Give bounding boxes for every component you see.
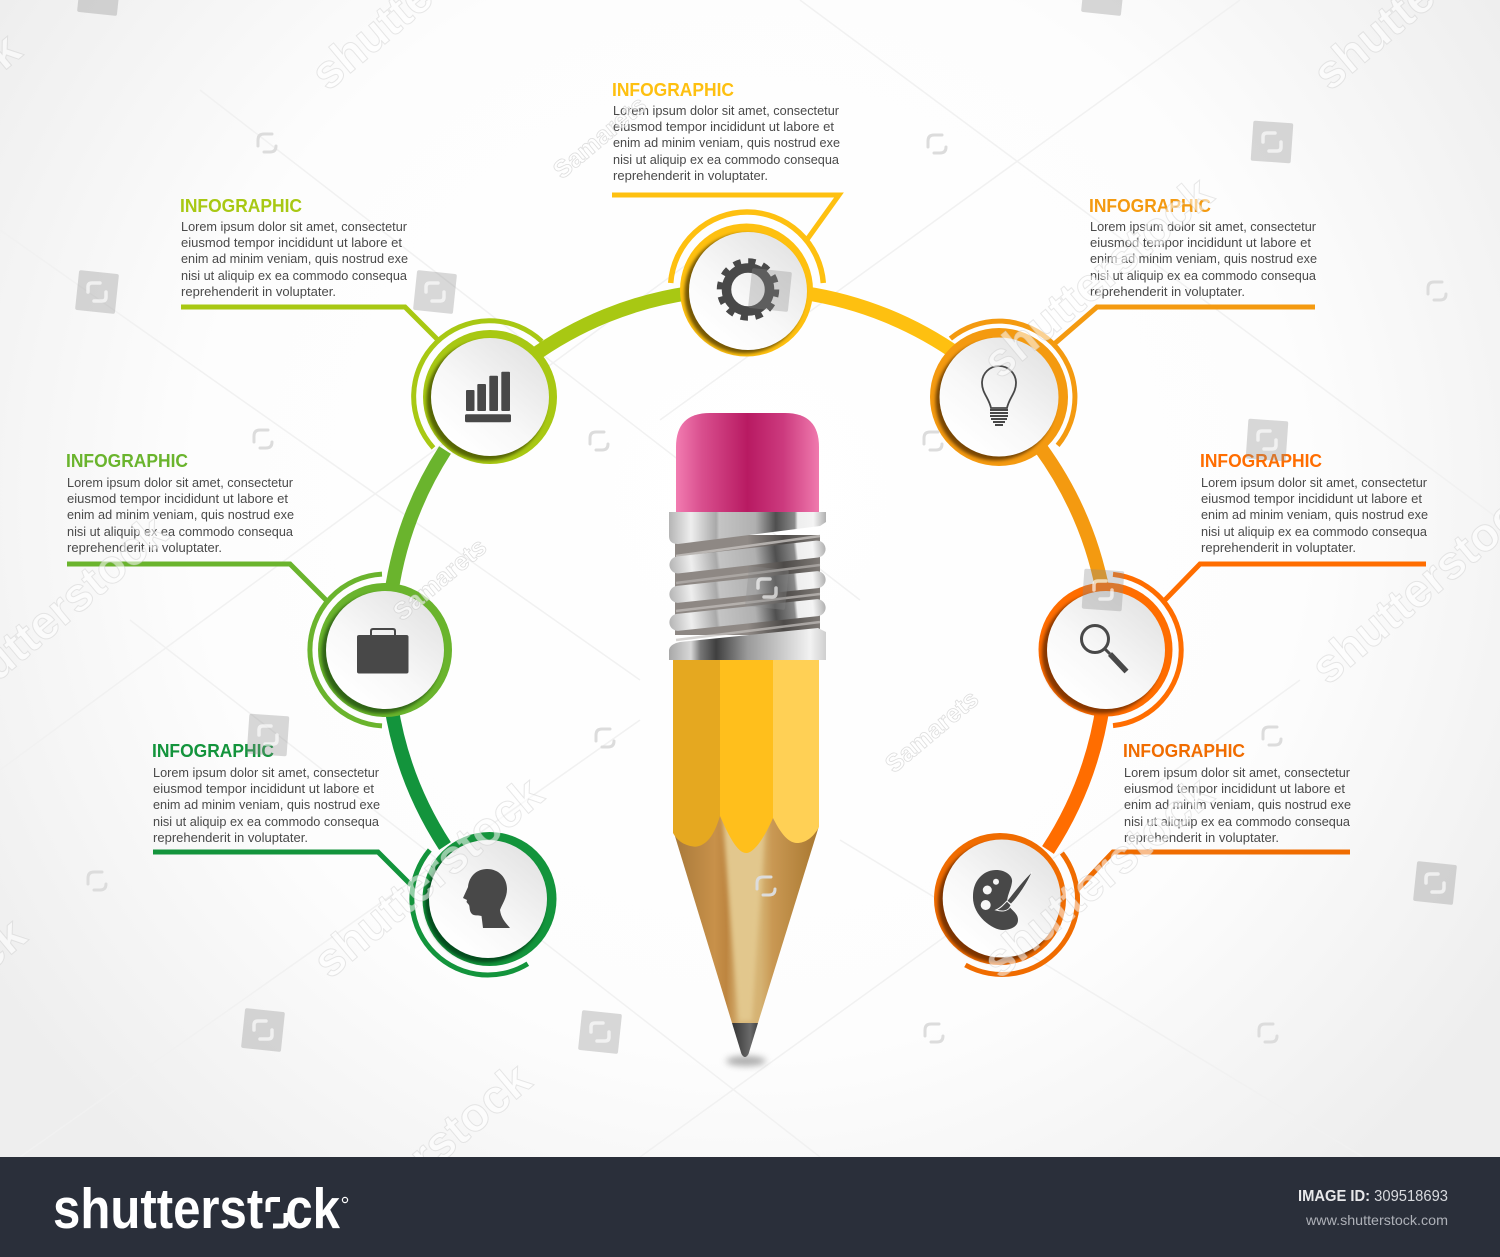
connector: head to briefcase	[391, 705, 445, 846]
website url: www.shutterstock.com	[1305, 1212, 1448, 1228]
icon: light bulb	[982, 366, 1016, 425]
body text	[613, 104, 840, 183]
body text	[181, 220, 408, 299]
node: head	[412, 832, 556, 975]
watermark overlay: shutterstock	[302, 765, 553, 988]
leader: bulb	[1053, 307, 1315, 345]
leader: gear	[612, 195, 839, 241]
pencil ferrule	[669, 512, 826, 660]
body text: nisi ut aliquip ex ea commodo consequa	[1090, 269, 1316, 283]
body text: reprehenderit in voluptater.	[67, 541, 222, 555]
body text: enim ad minim veniam, quis nostrud exe	[1201, 508, 1428, 522]
heading: INFOGRAPHIC	[180, 196, 302, 216]
body text: Lorem ipsum dolor sit amet, consectetur	[1090, 220, 1316, 234]
connector: chart to gear	[530, 293, 690, 358]
footer bar	[0, 1157, 1500, 1257]
watermark overlay: shutterstock	[972, 165, 1223, 388]
watermark overlay: Samarets	[548, 91, 652, 185]
body text: Lorem ipsum dolor sit amet, consectetur	[1201, 476, 1427, 490]
body text: nisi ut aliquip ex ea commodo consequa	[67, 525, 293, 539]
body text: enim ad minim veniam, quis nostrud exe	[67, 508, 294, 522]
body text: reprehenderit in voluptater.	[1201, 541, 1356, 555]
body text	[1201, 476, 1428, 555]
heading: INFOGRAPHIC	[66, 451, 188, 471]
text block: chart	[180, 196, 408, 299]
pencil body	[673, 655, 819, 853]
icon: head silhouette	[463, 869, 510, 928]
node: chart	[414, 321, 557, 464]
text block: gear	[612, 80, 840, 183]
text block: bulb	[1089, 196, 1317, 299]
pencil eraser	[676, 413, 819, 515]
body text: eiusmod tempor incididunt ut labore et	[1090, 236, 1312, 250]
connector: gear to bulb	[804, 293, 960, 356]
connector: bulb to magnifier	[1040, 447, 1103, 592]
connector: magnifier to palette	[1048, 705, 1103, 850]
icon: briefcase	[357, 629, 408, 674]
leader: chart	[181, 307, 438, 340]
node: gear	[671, 212, 823, 356]
heading: INFOGRAPHIC	[1200, 451, 1322, 471]
body text: eiusmod tempor incididunt ut labore et	[1124, 782, 1346, 796]
body text: eiusmod tempor incididunt ut labore et	[613, 120, 835, 134]
body text: reprehenderit in voluptater.	[1090, 285, 1245, 299]
main arc connectors	[391, 293, 1103, 850]
body text: reprehenderit in voluptater.	[613, 169, 768, 183]
heading: INFOGRAPHIC	[1123, 741, 1245, 761]
icon: bar chart	[465, 372, 511, 422]
text block: magnifier	[1200, 451, 1428, 555]
text block: palette	[1123, 741, 1351, 845]
leader lines	[67, 195, 1426, 890]
watermark overlay: shutterstock	[972, 765, 1223, 988]
connector: briefcase to chart	[391, 450, 445, 595]
body text: enim ad minim veniam, quis nostrud exe	[1124, 798, 1351, 812]
text block: head	[152, 741, 380, 845]
icon: magnifier	[1082, 626, 1126, 672]
body text: enim ad minim veniam, quis nostrud exe	[1090, 252, 1317, 266]
body text: Lorem ipsum dolor sit amet, consectetur	[153, 766, 379, 780]
body text: eiusmod tempor incididunt ut labore et	[1201, 492, 1423, 506]
body text: eiusmod tempor incididunt ut labore et	[153, 782, 375, 796]
footer logo: shutterstock	[53, 1177, 340, 1241]
heading: INFOGRAPHIC	[1089, 196, 1211, 216]
body text: eiusmod tempor incididunt ut labore et	[67, 492, 289, 506]
heading: INFOGRAPHIC	[152, 741, 274, 761]
heading: INFOGRAPHIC	[612, 80, 734, 100]
watermark overlay: Samarets	[388, 533, 492, 627]
leader: magnifier	[1165, 564, 1426, 600]
body text: nisi ut aliquip ex ea commodo consequa	[181, 269, 407, 283]
body text: enim ad minim veniam, quis nostrud exe	[153, 798, 380, 812]
pencil	[669, 413, 826, 1066]
body text: Lorem ipsum dolor sit amet, consectetur	[67, 476, 293, 490]
node: palette	[934, 833, 1078, 974]
node: briefcase	[310, 574, 452, 726]
body text	[1090, 220, 1317, 299]
body text: nisi ut aliquip ex ea commodo consequa	[1201, 525, 1427, 539]
body text: reprehenderit in voluptater.	[153, 831, 308, 845]
body text	[1124, 766, 1351, 845]
body text	[67, 476, 294, 555]
node: bulb	[930, 321, 1075, 466]
pencil lead shadow	[726, 1056, 766, 1066]
body text: Lorem ipsum dolor sit amet, consectetur	[1124, 766, 1350, 780]
body text: nisi ut aliquip ex ea commodo consequa	[153, 815, 379, 829]
leader: briefcase	[67, 564, 326, 600]
leader: head	[153, 852, 411, 885]
image id: IMAGE ID: 309518693	[1298, 1188, 1448, 1205]
body text: nisi ut aliquip ex ea commodo consequa	[1124, 815, 1350, 829]
node: magnifier	[1038, 574, 1181, 726]
body text: Lorem ipsum dolor sit amet, consectetur	[181, 220, 407, 234]
body text: nisi ut aliquip ex ea commodo consequa	[613, 153, 839, 167]
icon: palette and brush	[973, 870, 1032, 930]
body text: enim ad minim veniam, quis nostrud exe	[181, 252, 408, 266]
body text	[153, 766, 380, 845]
text block: briefcase	[66, 451, 294, 555]
body text: Lorem ipsum dolor sit amet, consectetur	[613, 104, 839, 118]
body text: enim ad minim veniam, quis nostrud exe	[613, 136, 840, 150]
body text: reprehenderit in voluptater.	[1124, 831, 1279, 845]
body text: eiusmod tempor incididunt ut labore et	[181, 236, 403, 250]
leader: palette	[1077, 852, 1350, 890]
body text: reprehenderit in voluptater.	[181, 285, 336, 299]
pencil wood tip	[674, 805, 819, 1023]
watermark overlay: Samarets	[880, 685, 984, 779]
pencil lead	[732, 1023, 758, 1057]
icon: gear	[720, 262, 776, 318]
